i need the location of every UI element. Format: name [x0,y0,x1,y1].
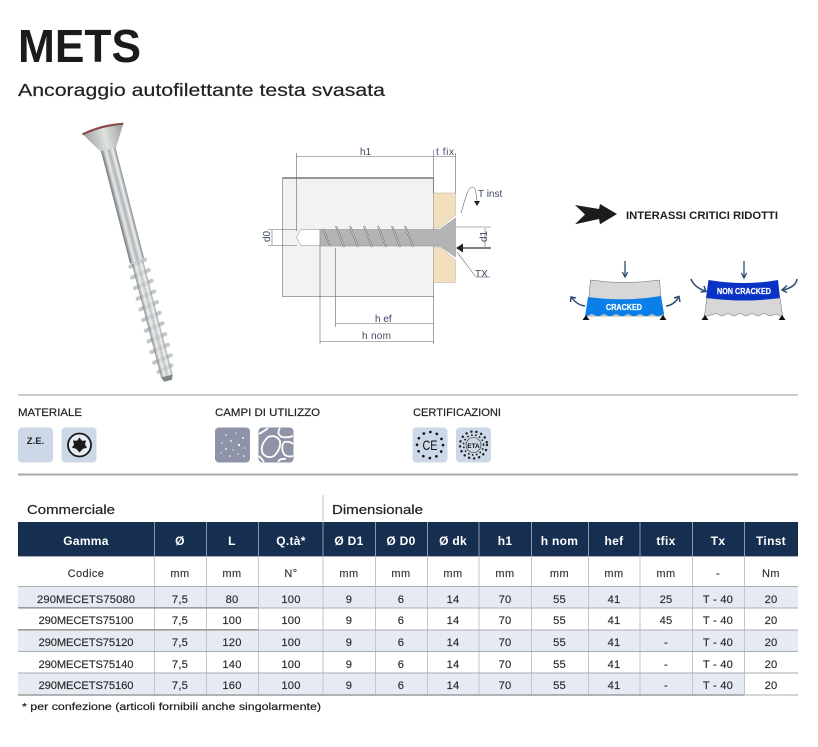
row 290MECETS75120: 9 [346,637,352,649]
row 290MECETS75140: 70 [499,659,511,671]
technical section diagram: T inst [478,189,502,200]
table header: Tinst [756,534,786,548]
row 290MECETS75100: 290MECETS75100 [38,615,134,627]
row 290MECETS75080 [37,594,777,606]
concrete base [282,178,434,296]
row 290MECETS75080: 20 [765,594,777,606]
row 290MECETS75160: 160 [222,680,242,692]
units row: Nm [762,568,780,580]
units row: - [716,568,720,580]
row 290MECETS75100: 55 [553,615,566,627]
row 290MECETS75120 [38,637,777,649]
drilled hole [296,230,320,246]
diagram: non cracked: NON CRACKED [717,287,771,296]
row 290MECETS75080: 41 [608,594,620,606]
units row: mm [170,568,190,580]
row 290MECETS75140: 41 [608,659,620,671]
row 290MECETS75120: T - 40 [703,637,733,649]
table header: Tx [711,534,725,548]
row 290MECETS75100: 14 [447,615,459,627]
panel: materiale [18,407,96,462]
row 290MECETS75120: 100 [281,637,301,649]
table header: Ø [175,534,185,548]
table header: h nom [541,534,578,548]
data table [18,522,798,695]
units row: N° [284,568,298,580]
units row: Codice [68,568,104,580]
row 290MECETS75140: 20 [765,659,777,671]
row 290MECETS75100 [38,615,777,627]
row 290MECETS75160 [38,680,777,692]
icon: zinc plated: Z.E. [27,436,44,447]
row 290MECETS75160: 14 [447,680,459,692]
row 290MECETS75140: 55 [553,659,566,671]
row 290MECETS75100: 45 [660,615,672,627]
row 290MECETS75080: 6 [398,594,404,606]
row 290MECETS75100: T - 40 [703,615,733,627]
units row: mm [339,568,359,580]
row 290MECETS75080: 25 [660,594,672,606]
table header: Gamma [63,534,109,548]
table header: h1 [498,534,512,548]
row 290MECETS75100: 100 [281,615,301,627]
heading: materiale: MATERIALE [18,407,82,419]
icon: masonry stones [258,428,294,462]
section heading: commerciale: Commerciale [27,502,115,517]
panel: certificazioni [412,407,501,462]
row 290MECETS75120: 70 [499,637,511,649]
row 290MECETS75120: 7,5 [172,637,188,649]
row 290MECETS75120: 41 [608,637,620,649]
row 290MECETS75120: 290MECETS75120 [38,637,134,649]
row 290MECETS75160: 41 [608,680,620,692]
technical section diagram: d1 [479,230,490,242]
table header: L [228,534,236,548]
row 290MECETS75100: 6 [398,615,404,627]
row 290MECETS75100: 41 [608,615,620,627]
row 290MECETS75080: 100 [281,594,301,606]
anchor screw [320,218,456,257]
row 290MECETS75140: 100 [281,659,301,671]
units row: mm [656,568,676,580]
row 290MECETS75140: T - 40 [703,659,733,671]
row 290MECETS75100: 9 [346,615,352,627]
row 290MECETS75140: 140 [222,659,242,671]
units row: mm [495,568,515,580]
units row [68,568,780,580]
diagram: non cracked [691,261,797,320]
row 290MECETS75160: 9 [346,680,352,692]
row 290MECETS75160: - [664,680,668,692]
row 290MECETS75080: 290MECETS75080 [37,594,135,606]
row 290MECETS75140: 290MECETS75140 [38,659,134,671]
table header: Ø D0 [386,534,416,548]
threads [323,226,413,247]
panel: campi di utilizzo [215,407,320,462]
callout: critical distances: INTERASSI CRITICI RIDOTTI [626,210,778,222]
diagram: cracked: CRACKED [606,303,642,312]
product photo: screw [81,121,189,386]
dimension lines [268,150,491,344]
table header: Ø dk [439,534,467,548]
row 290MECETS75140: 7,5 [172,659,188,671]
row 290MECETS75140 [38,659,777,671]
row 290MECETS75120: 6 [398,637,404,649]
row 290MECETS75120: 55 [553,637,566,649]
icon: ETA mark: ETA [467,443,480,450]
row 290MECETS75080: 80 [226,594,238,606]
icon: CE mark: CE [422,437,438,453]
table header [18,522,798,556]
row 290MECETS75160: 70 [499,680,511,692]
technical section diagram: d0 [262,230,273,242]
technical section diagram: h ef [375,314,392,325]
row 290MECETS75140: - [664,659,668,671]
row 290MECETS75140: 9 [346,659,352,671]
heading: campi di utilizzo: CAMPI DI UTILIZZO [215,407,320,419]
row 290MECETS75160: 100 [281,680,301,692]
icon: torx drive [62,428,96,462]
units row: mm [391,568,411,580]
heading: certificazioni: CERTIFICAZIONI [413,407,501,419]
row 290MECETS75080: T - 40 [703,594,733,606]
table header: Ø D1 [334,534,364,548]
row 290MECETS75160: 290MECETS75160 [38,680,134,692]
title: METS [18,20,141,72]
units row: mm [222,568,242,580]
row 290MECETS75160: 20 [765,680,777,692]
units row: mm [443,568,463,580]
row 290MECETS75120: 120 [222,637,242,649]
row 290MECETS75160: 7,5 [172,680,188,692]
row 290MECETS75080: 9 [346,594,352,606]
icon: concrete [215,428,250,462]
row 290MECETS75120: 14 [447,637,459,649]
row 290MECETS75120: - [664,637,668,649]
units row: mm [550,568,569,580]
wood fixture [434,193,456,282]
row 290MECETS75080: 55 [553,594,566,606]
row 290MECETS75160: 55 [553,680,566,692]
row 290MECETS75100: 70 [499,615,511,627]
technical section diagram [262,147,502,344]
footnote: * per confezione (articoli fornibili anche singolarmente) [22,701,321,713]
row 290MECETS75160: 6 [398,680,404,692]
table header: hef [605,534,624,548]
row 290MECETS75080: 7,5 [172,594,188,606]
row 290MECETS75080: 14 [447,594,459,606]
table header: Q.tà* [276,534,306,548]
units row: mm [604,568,624,580]
technical section diagram: h nom [362,331,391,342]
row 290MECETS75120: 20 [765,637,777,649]
row 290MECETS75140: 6 [398,659,404,671]
subtitle: Ancoraggio autofilettante testa svasata [18,80,385,100]
row 290MECETS75100: 100 [222,615,242,627]
technical section diagram: t fix [436,147,454,158]
dimension labels: h1 [360,147,372,158]
section heading: dimensionale: Dimensionale [332,502,423,517]
row 290MECETS75080: 70 [499,594,511,606]
technical section diagram: TX [475,269,488,280]
diagram: cracked [570,261,680,320]
icon: double arrow [575,204,617,224]
row 290MECETS75160: T - 40 [703,680,733,692]
row 290MECETS75100: 7,5 [172,615,188,627]
row 290MECETS75140: 14 [447,659,459,671]
row 290MECETS75100: 20 [765,615,777,627]
table header: tfix [656,534,676,548]
